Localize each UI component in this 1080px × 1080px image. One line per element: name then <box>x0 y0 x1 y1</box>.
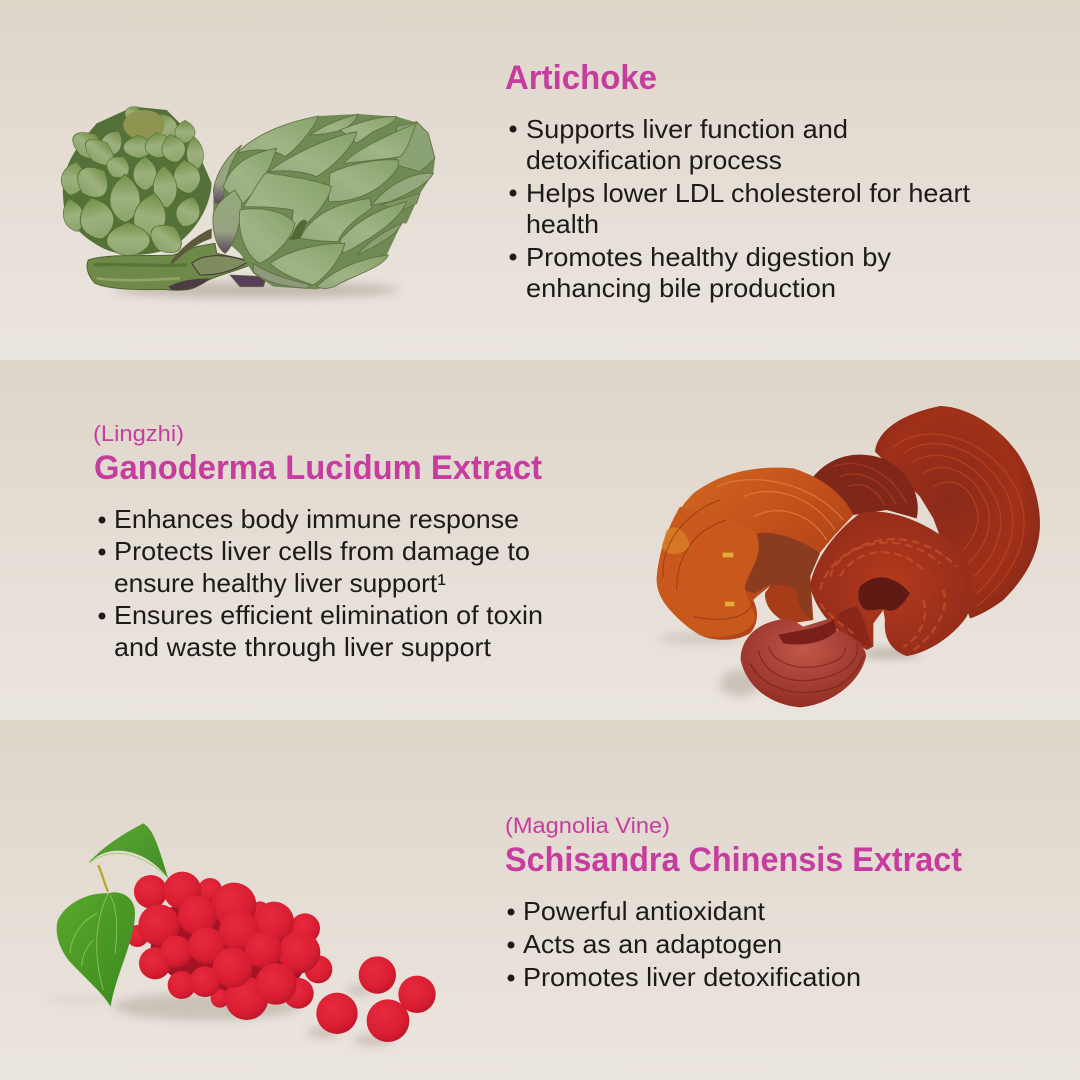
center red mushroom <box>810 512 972 656</box>
bullet list: artichoke benefits: Promotes healthy digestion by <box>526 242 891 272</box>
bullet list: artichoke benefits <box>510 114 971 303</box>
left orange mushroom <box>657 468 853 640</box>
panel: artichoke <box>0 0 1080 360</box>
bullet list: artichoke benefits: health <box>526 209 599 239</box>
bullet list: schisandra benefits <box>508 896 861 992</box>
panel: schisandra <box>0 720 1080 1080</box>
reishi mushrooms illustration <box>657 406 1040 707</box>
heading: Schisandra Chinensis Extract: Schisandra Chinensis Extract <box>505 841 962 879</box>
back right mushroom <box>875 406 1040 618</box>
front small mushroom <box>741 618 866 707</box>
subheading: Magnolia Vine: (Magnolia Vine) <box>505 813 670 838</box>
panel: ganoderma <box>0 360 1080 720</box>
bullet list: artichoke benefits: Helps lower LDL cholesterol for heart <box>526 178 971 208</box>
heading: Artichoke: Artichoke <box>505 59 657 97</box>
heading: Ganoderma Lucidum Extract: Ganoderma Lucidum Extract <box>94 449 542 487</box>
upper leaf <box>89 823 168 878</box>
artichoke photo illustration <box>59 102 435 297</box>
bullet list: artichoke benefits: enhancing bile production <box>526 273 836 303</box>
bullet list: ganoderma benefits: Enhances body immune response <box>114 504 519 534</box>
bullet list: ganoderma benefits <box>98 504 543 662</box>
left artichoke head <box>59 102 212 260</box>
loose berries <box>316 956 436 1042</box>
bullet list: ganoderma benefits: Protects liver cells from damage to <box>114 536 530 566</box>
bullet list: artichoke benefits: Supports liver function and <box>526 114 848 144</box>
bullet list: ganoderma benefits: and waste through liver support <box>114 632 492 662</box>
subheading: Lingzhi: (Lingzhi) <box>93 421 184 446</box>
berry cluster <box>126 872 332 1020</box>
bullet list: schisandra benefits: Powerful antioxidant <box>523 896 766 926</box>
large leaf <box>57 892 135 1007</box>
leaf stem <box>98 865 108 892</box>
artichoke stem <box>87 228 250 290</box>
bullet list: ganoderma benefits: Ensures efficient elimination of toxin <box>114 600 543 630</box>
bullet list: schisandra benefits: Promotes liver detoxification <box>523 962 861 992</box>
schisandra berries illustration <box>47 823 436 1045</box>
right artichoke head <box>213 114 435 289</box>
bullet list: ganoderma benefits: ensure healthy liver support¹ <box>114 568 446 598</box>
bullet list: artichoke benefits: detoxification process <box>526 145 782 175</box>
back middle mushroom <box>813 455 918 518</box>
bullet list: schisandra benefits: Acts as an adaptogen <box>523 929 782 959</box>
